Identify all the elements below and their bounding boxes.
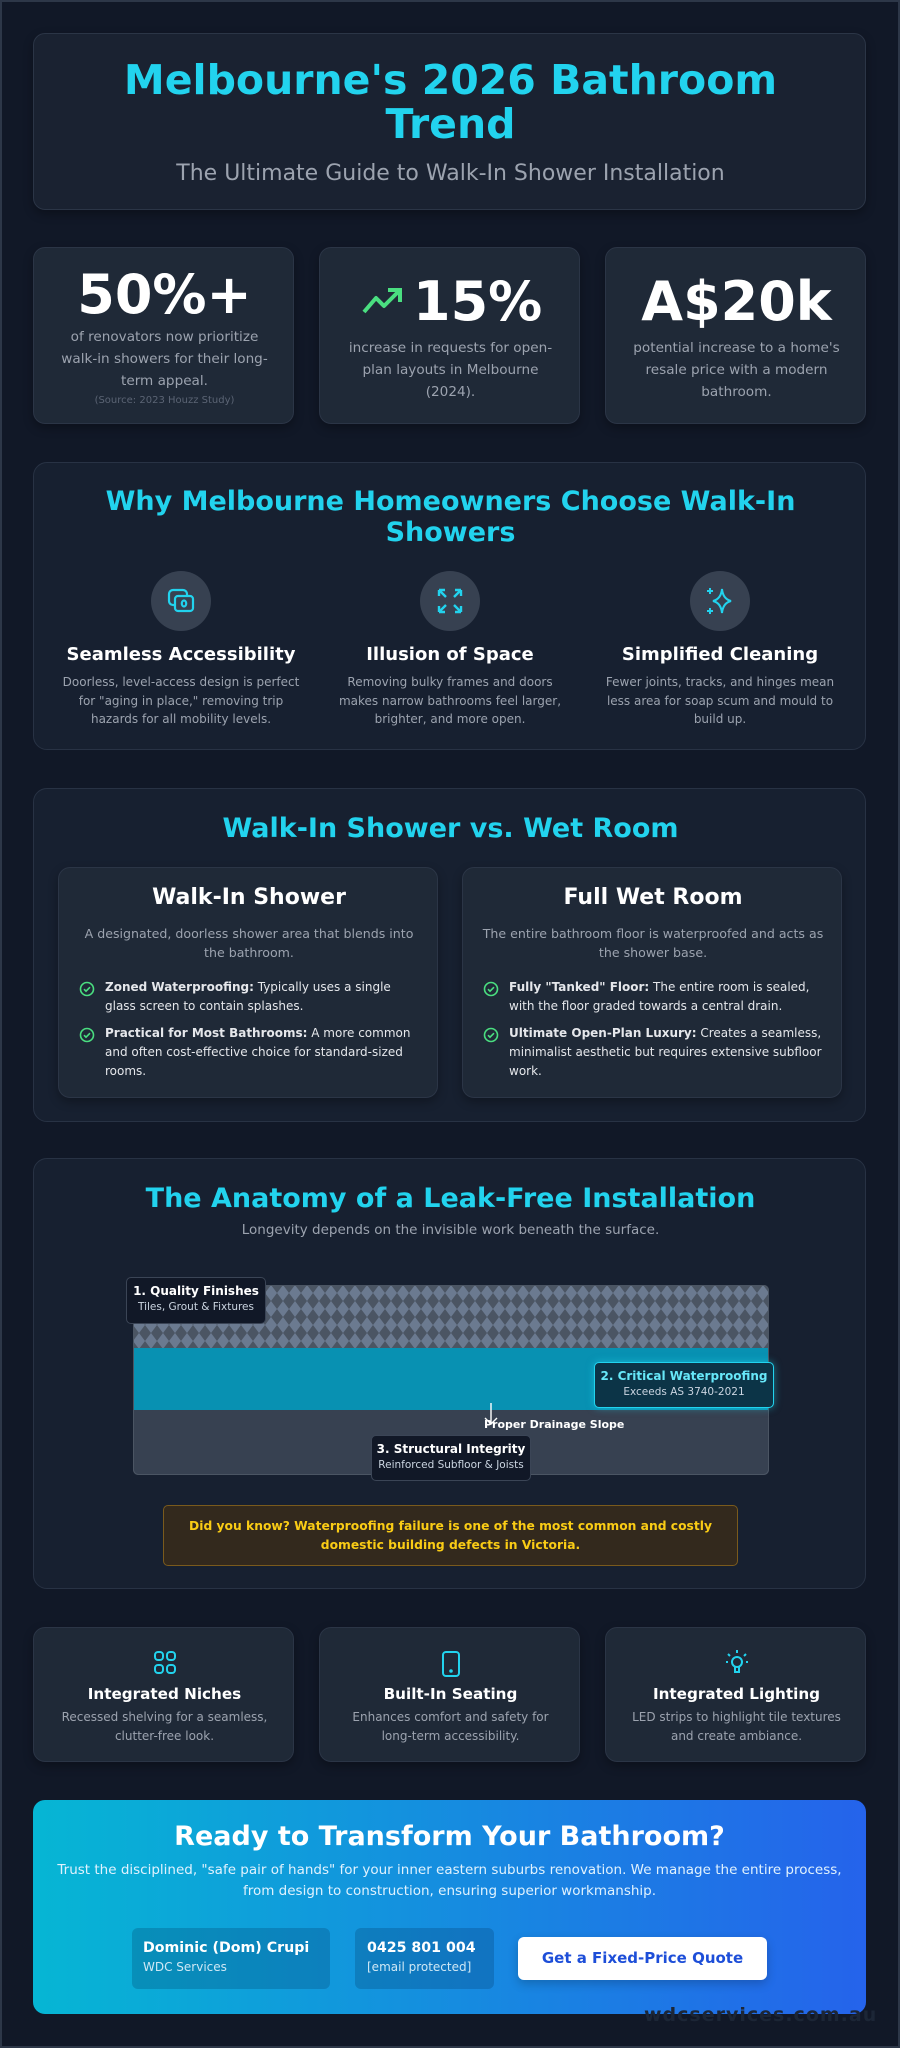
label: structural <box>371 1435 531 1481</box>
bullet: Practical for Most Bathrooms: A more common and often cost-effective choice for standard-sized rooms. <box>105 1026 410 1078</box>
column: accessibility <box>63 571 300 726</box>
callout: did you know: domestic building defects in Victoria. <box>321 1538 580 1552</box>
card: wet room <box>462 867 842 1098</box>
panel: why walk-in showers <box>33 462 866 750</box>
label: quality finishes: Tiles, Grout & Fixtures <box>138 1301 254 1313</box>
column: cleaning <box>606 571 834 726</box>
icon: arrows <box>420 571 480 631</box>
card: walk-in shower <box>58 867 438 1098</box>
panel: anatomy <box>33 1158 866 1589</box>
CTA panel <box>33 1800 866 2014</box>
stat: A$20k: potential increase to a home's resale price with a modern bathroom. <box>633 340 840 400</box>
CTA text: Trust the disciplined, "safe pair of hands" for your inner eastern suburbs renovation. We manage the entire process, from design to construction, ensuring superior workmanship. <box>57 1862 842 1899</box>
heading: Why Melbourne Homeowners Choose Walk-In Showers <box>106 486 795 548</box>
card: walk-in shower: Walk-In Shower <box>152 885 346 910</box>
heading: Walk-In Shower vs. Wet Room <box>222 813 679 844</box>
subtitle: Longevity depends on the invisible work beneath the surface. <box>242 1222 659 1238</box>
column: space: Illusion of Space <box>366 644 534 665</box>
stat: 50%+: 50%+ <box>77 263 252 326</box>
stat: 50%+: of renovators now prioritize walk-in showers for their long-term appeal. <box>61 329 268 389</box>
label: structural: 3. Structural Integrity <box>377 1442 525 1456</box>
title: Melbourne's 2026 Bathroom <box>124 56 777 104</box>
CTA heading: Ready to Transform Your Bathroom? <box>174 1821 725 1852</box>
card: wet room: Full Wet Room <box>563 885 742 910</box>
icon: seat <box>442 1651 460 1677</box>
bullet: Ultimate Open-Plan Luxury: Creates a seamless, minimalist aesthetic but requires extensive subfloor work. <box>509 1026 822 1078</box>
column: cleaning: Simplified Cleaning <box>622 644 818 665</box>
label: quality finishes: 1. Quality Finishes <box>133 1284 259 1298</box>
title <box>124 56 777 148</box>
contact: name <box>132 1928 330 1989</box>
feature: lighting: Integrated Lighting <box>653 1685 820 1703</box>
stat: 50%+ <box>33 247 294 424</box>
watermark: wdcservices.com.au <box>644 2004 877 2026</box>
contact: phone <box>355 1928 494 1989</box>
icon: accessibility <box>151 571 211 631</box>
label: structural: Reinforced Subfloor & Joists <box>378 1459 524 1471</box>
feature: seating: Built-In Seating <box>384 1685 517 1703</box>
contact: name: Dominic (Dom) Crupi <box>143 1940 309 1956</box>
column: accessibility: Doorless, level-access design is perfect for "aging in place," removing trip hazards for all mobility levels. <box>63 675 299 726</box>
card: walk-in shower: A designated, doorless shower area that blends into the bathroom. <box>85 926 413 960</box>
stat: 15%: 15% <box>413 270 542 333</box>
callout: did you know <box>163 1505 738 1566</box>
stat: 15%: increase in requests for open-plan layouts in Melbourne (2024). <box>349 340 552 400</box>
feature: niches: Integrated Niches <box>88 1685 241 1703</box>
title: Trend <box>385 100 516 148</box>
icon: sparkles <box>690 571 750 631</box>
column: accessibility: Seamless Accessibility <box>67 644 295 665</box>
stat: 15% <box>319 247 580 424</box>
callout: did you know: Did you know? Waterproofing failure is one of the most common and costly <box>189 1519 712 1533</box>
label: waterproofing: Exceeds AS 3740-2021 <box>623 1386 745 1398</box>
feature: seating <box>319 1627 580 1762</box>
feature: lighting: LED strips to highlight tile textures and create ambiance. <box>632 1710 841 1742</box>
label: quality finishes <box>126 1277 266 1324</box>
contact: phone: 0425 801 004 <box>367 1940 476 1956</box>
stat: A$20k: A$20k <box>641 270 832 333</box>
feature: seating: Enhances comfort and safety for long-term accessibility. <box>352 1710 549 1742</box>
button: quote: Get a Fixed-Price Quote <box>542 1949 743 1967</box>
stat: A$20k <box>605 247 866 424</box>
contact: name: WDC Services <box>143 1960 227 1974</box>
column: space <box>339 571 561 726</box>
feature: niches: Recessed shelving for a seamless, clutter-free look. <box>62 1710 267 1742</box>
stat: 50%+: (Source: 2023 Houzz Study) <box>95 395 234 406</box>
button: quote <box>518 1937 767 1980</box>
icon: trend arrow <box>362 288 402 314</box>
label: waterproofing <box>594 1362 774 1408</box>
card: wet room: The entire bathroom floor is waterproofed and acts as the shower base. <box>483 926 823 960</box>
panel: comparison <box>33 788 866 1122</box>
header card <box>33 33 866 210</box>
label: waterproofing: 2. Critical Waterproofing <box>600 1369 768 1383</box>
column: space: Removing bulky frames and doors makes narrow bathrooms feel larger, brighter, and more open. <box>339 675 561 726</box>
bullet: Fully "Tanked" Floor: The entire room is sealed, with the floor graded towards a central drain. <box>509 980 809 1013</box>
subtitle: The Ultimate Guide to Walk-In Shower Installation <box>176 161 725 186</box>
feature: lighting <box>605 1627 866 1762</box>
column: cleaning: Fewer joints, tracks, and hinges mean less area for soap scum and mould to build up. <box>606 675 834 726</box>
icon: bulb <box>726 1650 748 1673</box>
icon: niches <box>154 1651 176 1674</box>
feature: niches <box>33 1627 294 1762</box>
arrow: drainage <box>484 1403 498 1425</box>
layer diagram <box>133 1285 769 1475</box>
drainage label: Proper Drainage Slope <box>484 1418 624 1431</box>
bullet: Zoned Waterproofing: Typically uses a single glass screen to contain splashes. <box>105 980 391 1013</box>
heading: The Anatomy of a Leak-Free Installation <box>146 1183 755 1214</box>
contact: phone: [email protected] <box>367 1960 471 1974</box>
